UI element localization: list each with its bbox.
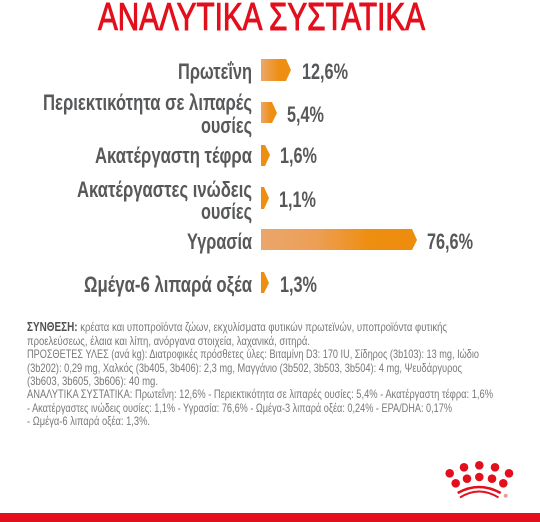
row: fat content: 5,4%: [287, 102, 324, 127]
row: protein: 12,6%: [302, 59, 348, 84]
row: crude ash: 1,6%: [280, 143, 317, 168]
row: protein: [178, 59, 348, 84]
row: protein: Πρωτεΐνη: [178, 59, 252, 84]
composition text block: [27, 320, 493, 428]
footer bar: [0, 513, 540, 522]
chart: nutrient bars: [43, 59, 473, 297]
row: omega-6: Ωμέγα-6 λιπαρά οξέα: [84, 272, 252, 297]
row: crude fibre: ουσίες: [201, 199, 252, 224]
row: crude fibre: Ακατέργαστες ινώδεις: [77, 177, 252, 202]
composition text block: ΣΥΝΘΕΣΗ: κρέατα και υποπροϊόντα ζώων, εκχυλίσματα φυτικών πρωτεϊνών, υποπροϊόντα φυτικής: [27, 320, 447, 334]
row: fat content: [43, 90, 324, 138]
row: moisture: 76,6%: [427, 229, 473, 254]
composition text block: προελεύσεως, έλαια και λίπη, ανόργανα στοιχεία, λαχανικά, σιτηρά.: [27, 334, 310, 348]
row: fat content: ουσίες: [201, 113, 252, 138]
row: crude fibre: 1,1%: [279, 187, 316, 212]
icon: crown logo: [445, 461, 513, 498]
row: omega-6: 1,3%: [280, 272, 317, 297]
composition text block: - Ωμέγα-6 λιπαρά οξέα: 1,3%.: [27, 414, 150, 428]
row: moisture: Υγρασία: [187, 229, 252, 254]
row: fat content: Περιεκτικότητα σε λιπαρές: [43, 90, 252, 115]
row: moisture: [187, 229, 473, 254]
composition text block: (3b603, 3b605, 3b606): 40 mg.: [27, 374, 158, 388]
row: crude fibre: [77, 177, 316, 224]
row: crude ash: Ακατέργαστη τέφρα: [95, 143, 252, 168]
